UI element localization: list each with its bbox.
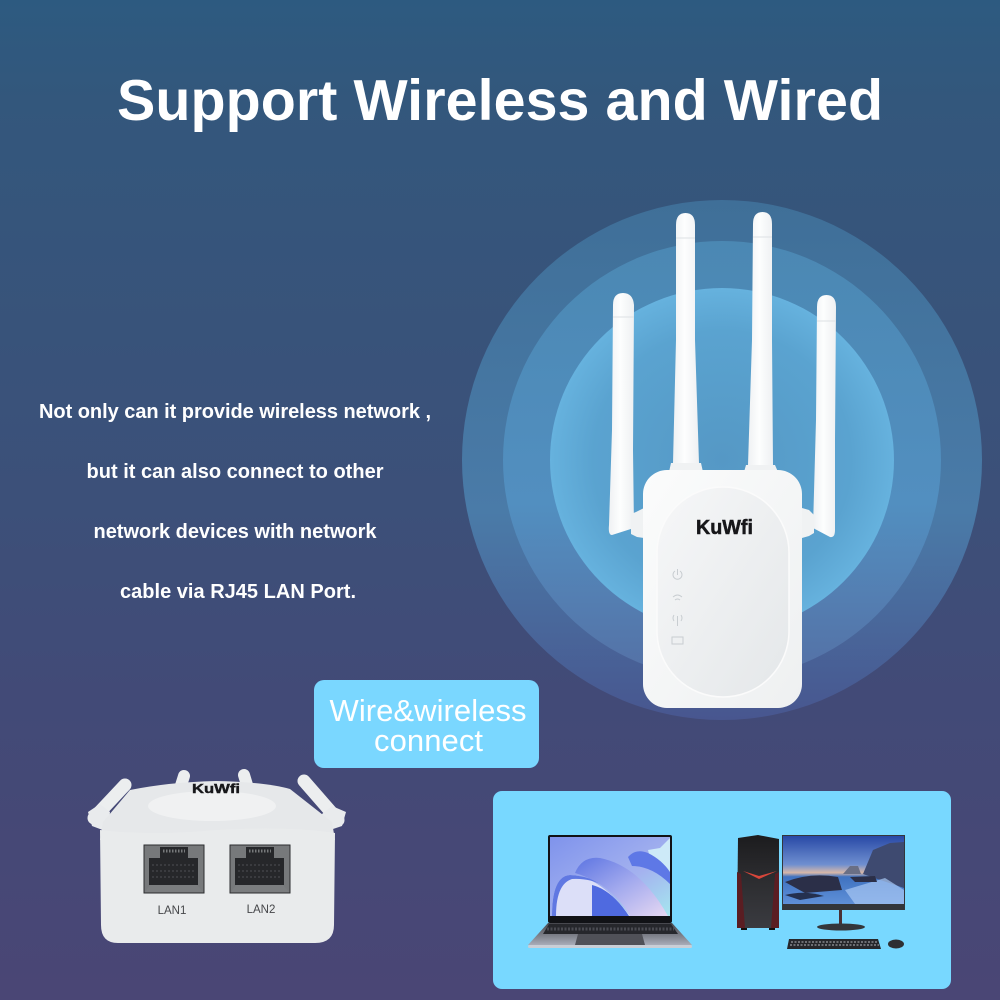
port labels: LAN1 xyxy=(158,905,186,917)
router body xyxy=(643,470,802,708)
top dome xyxy=(100,781,335,840)
description text: cable via RJ45 LAN Port. xyxy=(120,581,356,603)
LAN2 port xyxy=(230,845,290,893)
status icons xyxy=(672,569,683,644)
callout xyxy=(314,680,539,768)
callout: Wire&wireless xyxy=(330,693,526,728)
port labels xyxy=(158,904,275,917)
signal rings xyxy=(462,200,982,720)
title: Support Wireless and Wired xyxy=(117,69,883,133)
mouse xyxy=(888,940,904,948)
antenna 2 xyxy=(673,213,699,463)
description text: network devices with network xyxy=(94,521,377,543)
desktop tower xyxy=(737,835,779,930)
logo: KuWfi xyxy=(696,517,753,539)
description text xyxy=(39,401,431,603)
antenna 3 xyxy=(748,212,773,465)
laptop xyxy=(528,835,692,948)
router rear view with LAN ports xyxy=(88,775,346,943)
description text: Not only can it provide wireless network , xyxy=(39,401,431,423)
rear antennas xyxy=(94,775,338,820)
keyboard xyxy=(787,939,881,949)
antenna 4 xyxy=(813,295,836,537)
port labels: LAN2 xyxy=(247,904,275,916)
antenna 1 xyxy=(609,293,634,535)
rear logo: KuWfi xyxy=(192,781,240,796)
devices panel xyxy=(493,791,951,989)
callout: connect xyxy=(374,723,483,758)
monitor xyxy=(782,835,905,930)
antenna end caps xyxy=(88,804,346,832)
LAN1 port xyxy=(144,845,204,893)
body xyxy=(100,829,335,943)
antenna joints xyxy=(631,463,814,538)
router with four antennas xyxy=(609,212,836,708)
description text: but it can also connect to other xyxy=(86,461,384,483)
front oval panel xyxy=(657,487,789,697)
